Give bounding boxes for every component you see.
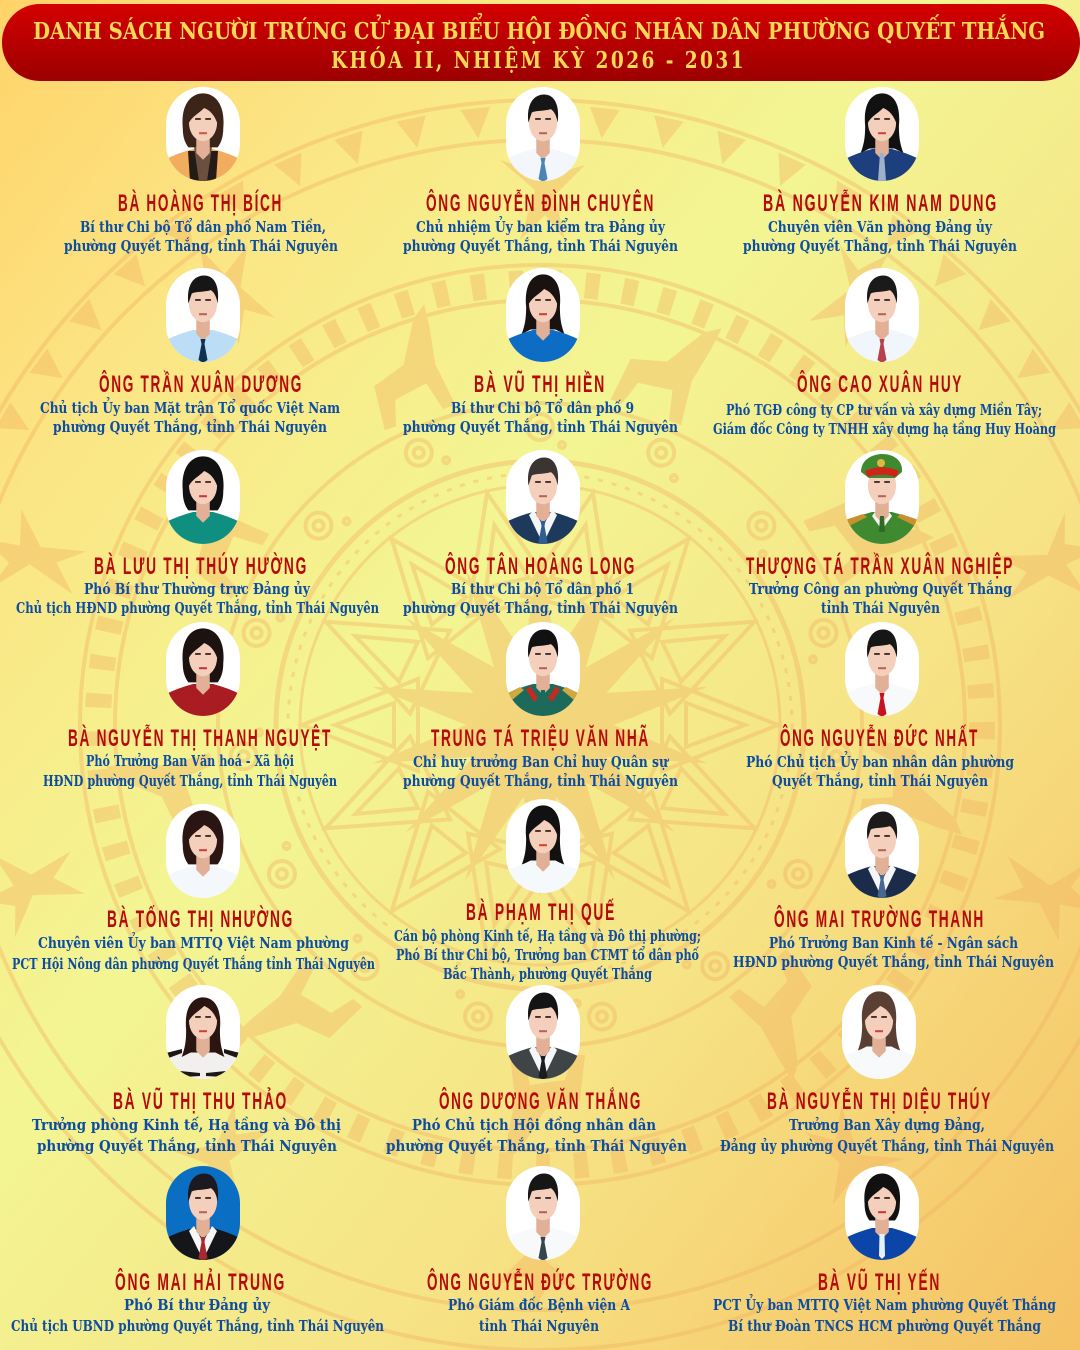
role <box>43 753 337 790</box>
role: Phó Bí thư Đảng ủy <box>124 1297 271 1314</box>
role: Phó Chủ tịch Ủy ban nhân dân phường <box>746 751 1014 771</box>
name: BÀ TỐNG THỊ NHƯỜNG <box>107 905 294 933</box>
title banner <box>2 4 1080 81</box>
role: PCT Hội Nông dân phường Quyết Thắng tỉnh Thái Nguyên <box>12 955 375 973</box>
role: phường Quyết Thắng, tỉnh Thái Nguyên <box>386 1137 687 1155</box>
name: ÔNG TRẦN XUÂN DƯƠNG <box>99 370 303 398</box>
role <box>32 1116 341 1155</box>
role: Phó Trưởng Ban Kinh tế - Ngân sách <box>769 934 1018 952</box>
portrait <box>166 1166 240 1261</box>
portrait <box>166 804 240 898</box>
panel: Nguyễn Kim Nam Dung <box>743 87 1017 255</box>
role: Phó Chủ tịch Hội đồng nhân dân <box>412 1117 656 1134</box>
name: BÀ HOÀNG THỊ BÍCH <box>118 189 283 217</box>
portrait <box>845 450 919 544</box>
role: phường Quyết Thắng, tỉnh Thái Nguyên <box>403 599 678 617</box>
portrait <box>845 87 919 181</box>
portrait <box>506 985 580 1080</box>
name: BÀ LƯU THỊ THÚY HƯỜNG <box>94 552 308 580</box>
name: ÔNG NGUYỄN ĐÌNH CHUYÊN <box>426 188 655 217</box>
portrait <box>166 622 240 716</box>
portrait <box>506 450 580 545</box>
panel: Nguyễn Đức Nhất <box>746 622 1014 790</box>
role: Phó Giám đốc Bệnh viện A <box>448 1296 631 1314</box>
role <box>403 216 678 255</box>
portrait <box>166 87 240 181</box>
name: BÀ VŨ THỊ YẾN <box>818 1268 941 1296</box>
role: Chuyên viên Ủy ban MTTQ Việt Nam phường <box>38 932 349 952</box>
panel: Mai Hải Trung <box>11 1166 384 1335</box>
role <box>720 1117 1054 1155</box>
role <box>733 934 1054 971</box>
role <box>394 927 701 983</box>
role: tỉnh Thái Nguyên <box>821 600 940 617</box>
panel: Trần Xuân Nghiệp <box>746 450 1014 617</box>
role: tỉnh Thái Nguyên <box>479 1318 599 1335</box>
portrait <box>506 1166 580 1261</box>
role: Trưởng phòng Kinh tế, Hạ tầng và Đô thị <box>32 1116 341 1134</box>
role <box>403 399 678 436</box>
name: ÔNG NGUYỄN ĐỨC TRƯỜNG <box>427 1267 653 1296</box>
panel: Nguyễn Đình Chuyên <box>403 87 678 255</box>
role: Quyết Thắng, tỉnh Thái Nguyên <box>772 772 988 790</box>
portrait <box>845 804 919 899</box>
role: Chủ tịch UBND phường Quyết Thắng, tỉnh Thái Nguyên <box>11 1317 384 1335</box>
role <box>64 218 338 255</box>
portrait <box>166 985 240 1079</box>
panel: Vũ Thị Yến <box>713 1166 1056 1335</box>
role <box>40 397 341 436</box>
role <box>713 401 1056 438</box>
name: ÔNG DƯƠNG VĂN THẮNG <box>439 1087 642 1115</box>
role: phường Quyết Thắng, tỉnh Thái Nguyên <box>403 772 678 790</box>
role: Chủ tịch HĐND phường Quyết Thắng, tỉnh Thái Nguyên <box>16 599 379 617</box>
role: Cán bộ phòng Kinh tế, Hạ tầng và Đô thị phường; <box>394 927 701 945</box>
panel: Nguyễn Thị Thanh Nguyệt <box>43 622 337 790</box>
panel: Nguyễn Thị Diệu Thúy <box>720 985 1054 1155</box>
role: phường Quyết Thắng, tỉnh Thái Nguyên <box>53 418 327 436</box>
role: Bí thư Chi bộ Tổ dân phố 9 <box>451 399 634 417</box>
role: phường Quyết Thắng, tỉnh Thái Nguyên <box>403 237 678 255</box>
portrait <box>845 1166 919 1260</box>
portrait <box>506 87 580 182</box>
role: Trưởng Ban Xây dựng Đảng, <box>789 1117 985 1134</box>
panel: Bà Hoàng Thị Bích <box>64 87 338 255</box>
role: Chủ tịch Ủy ban Mặt trận Tổ quốc Việt Nam <box>40 397 341 417</box>
role <box>403 754 678 790</box>
role <box>386 1117 687 1155</box>
role <box>743 219 1017 255</box>
name: ÔNG TÂN HOÀNG LONG <box>445 552 636 580</box>
name: ÔNG MAI HẢI TRUNG <box>115 1267 286 1296</box>
panel: Triệu Văn Nhã <box>403 622 678 790</box>
role: HĐND phường Quyết Thắng, tỉnh Thái Nguyên <box>43 772 337 790</box>
name: BÀ NGUYỄN THỊ THANH NGUYỆT <box>68 723 332 752</box>
portrait <box>842 985 916 1079</box>
role: Chỉ huy trưởng Ban Chỉ huy Quân sự <box>413 754 669 771</box>
role: Bí thư Chi bộ Tổ dân phố Nam Tiền, <box>80 218 326 236</box>
role <box>746 751 1014 790</box>
panel: Phạm Thị Quế <box>394 799 701 983</box>
portrait <box>506 799 580 893</box>
role: Chuyên viên Văn phòng Đảng ủy <box>768 219 992 236</box>
panel: Lưu Thị Thúy Hường <box>16 450 379 617</box>
role <box>448 1296 631 1335</box>
role: phường Quyết Thắng, tỉnh Thái Nguyên <box>403 418 678 436</box>
role: Phó Bí thư Thường trực Đảng ủy <box>84 581 310 598</box>
role: phường Quyết Thắng, tỉnh Thái Nguyên <box>37 1137 337 1155</box>
role: Trưởng Công an phường Quyết Thắng <box>749 580 1012 598</box>
panel: Vũ Thị Thu Thảo <box>32 985 341 1155</box>
role: phường Quyết Thắng, tỉnh Thái Nguyên <box>64 237 338 255</box>
panel: Vũ Thị Hiền <box>403 268 678 436</box>
role <box>749 580 1012 617</box>
title banner: KHÓA II, NHIỆM KỲ 2026 - 2031 <box>331 47 746 74</box>
panel: Cao Xuân Huy <box>713 268 1056 438</box>
role <box>12 932 375 973</box>
portrait <box>166 450 240 544</box>
panel: Nguyễn Đức Trường <box>427 1166 653 1335</box>
role <box>16 581 379 617</box>
name: BÀ VŨ THỊ THU THẢO <box>113 1086 288 1115</box>
portrait <box>845 268 919 363</box>
role <box>403 580 678 617</box>
role: Phó Bí thư Chi bộ, Trưởng ban CTMT tổ dân phố <box>396 946 699 964</box>
role: phường Quyết Thắng, tỉnh Thái Nguyên <box>743 237 1017 255</box>
panel: Trần Xuân Dương <box>40 268 341 436</box>
panel: Mai Trường Thanh <box>733 804 1054 971</box>
portrait <box>166 268 240 363</box>
portrait <box>845 622 919 717</box>
name: BÀ PHẠM THỊ QUẾ <box>466 898 616 926</box>
role: Bắc Thành, phường Quyết Thắng <box>443 965 652 983</box>
panel: Tân Hoàng Long <box>403 450 678 617</box>
role: Phó Trưởng Ban Văn hoá - Xã hội <box>86 753 294 770</box>
name: BÀ VŨ THỊ HIỀN <box>474 370 606 398</box>
portrait <box>506 622 580 716</box>
role: Chủ nhiệm Ủy ban kiểm tra Đảng ủy <box>416 216 665 236</box>
name: TRUNG TÁ TRIỆU VĂN NHÃ <box>431 724 650 752</box>
portrait <box>506 268 580 362</box>
role <box>713 1294 1056 1335</box>
panel: Dương Văn Thắng <box>386 985 687 1155</box>
panel: Tống Thị Nhường <box>12 804 375 973</box>
role <box>11 1297 384 1335</box>
role: Bí thư Chi bộ Tổ dân phố 1 <box>451 580 634 598</box>
